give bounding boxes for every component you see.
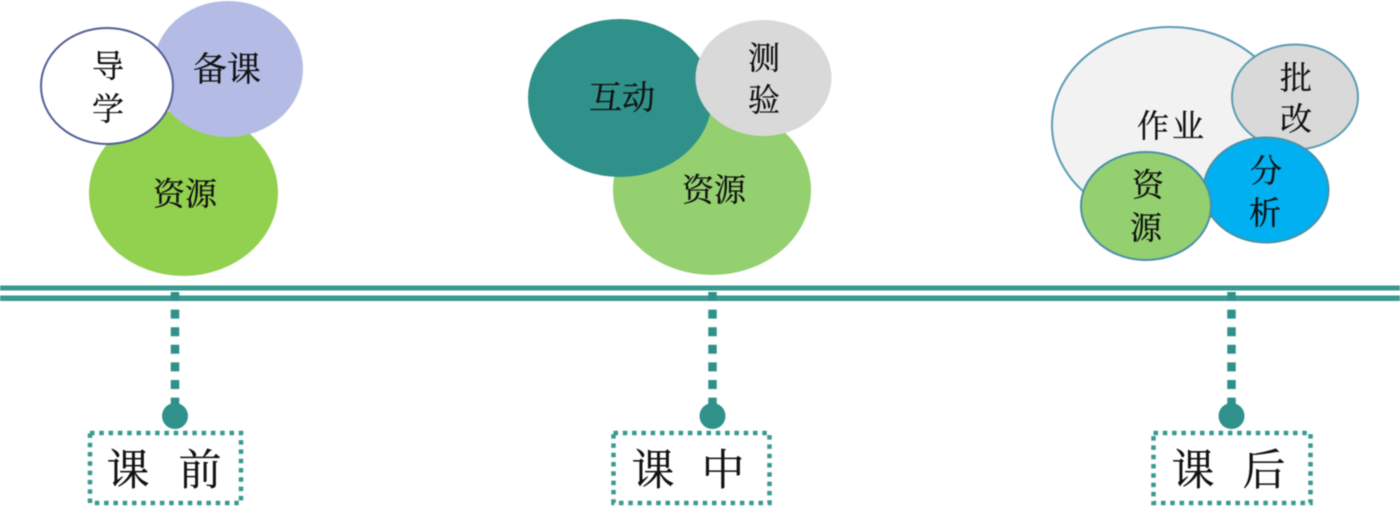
label: during class (614, 433, 770, 503)
bubble: guided study (41, 28, 173, 144)
bubble: resources (613, 105, 811, 275)
label: during class: 中 (702, 448, 744, 495)
bubble: homework: 作业 (1137, 108, 1207, 144)
bubble: grading: 改 (1280, 101, 1312, 137)
bubble: resources: 资 (1132, 167, 1165, 203)
label: after class: 课 (1172, 448, 1214, 495)
connector: during class (700, 292, 726, 429)
bubble: quiz: 测 (748, 40, 780, 76)
connector: after class (1218, 292, 1244, 429)
bubble: homework (1052, 27, 1288, 223)
bubble: analysis (1204, 138, 1328, 242)
label: during class: 课 (632, 448, 674, 495)
bubble: interaction: 互动 (589, 80, 655, 117)
label: before class: 前 (178, 448, 222, 495)
label: before class: 课 (106, 448, 150, 495)
bubble: interaction (528, 19, 712, 177)
bubble: analysis: 析 (1249, 195, 1281, 231)
bubble: lesson prep: 备课 (193, 51, 261, 89)
bubble: resources: 资源 (682, 172, 747, 208)
bubble: resources: 源 (1130, 210, 1163, 246)
bubble: guided study: 学 (92, 91, 124, 127)
panel: before class cluster (41, 1, 303, 276)
label: after class: 后 (1242, 448, 1286, 495)
label: before class (90, 433, 241, 503)
bubble: resources (1081, 152, 1211, 260)
label: after class (1154, 433, 1310, 503)
panel: after class cluster (1052, 27, 1358, 260)
bubble: guided study: 导 (92, 48, 124, 84)
panel: during class cluster (528, 19, 832, 275)
timeline double line (0, 286, 1400, 301)
bubble: grading (1232, 44, 1358, 150)
bubble: resources (89, 110, 278, 276)
bubble: resources: 资源 (153, 176, 218, 212)
connector: before class (162, 292, 188, 429)
bubble: lesson prep (153, 1, 303, 137)
bubble: quiz: 验 (748, 82, 780, 118)
bubble: quiz (696, 20, 832, 136)
bubble: grading: 批 (1280, 60, 1312, 96)
bubble: analysis: 分 (1250, 153, 1282, 189)
